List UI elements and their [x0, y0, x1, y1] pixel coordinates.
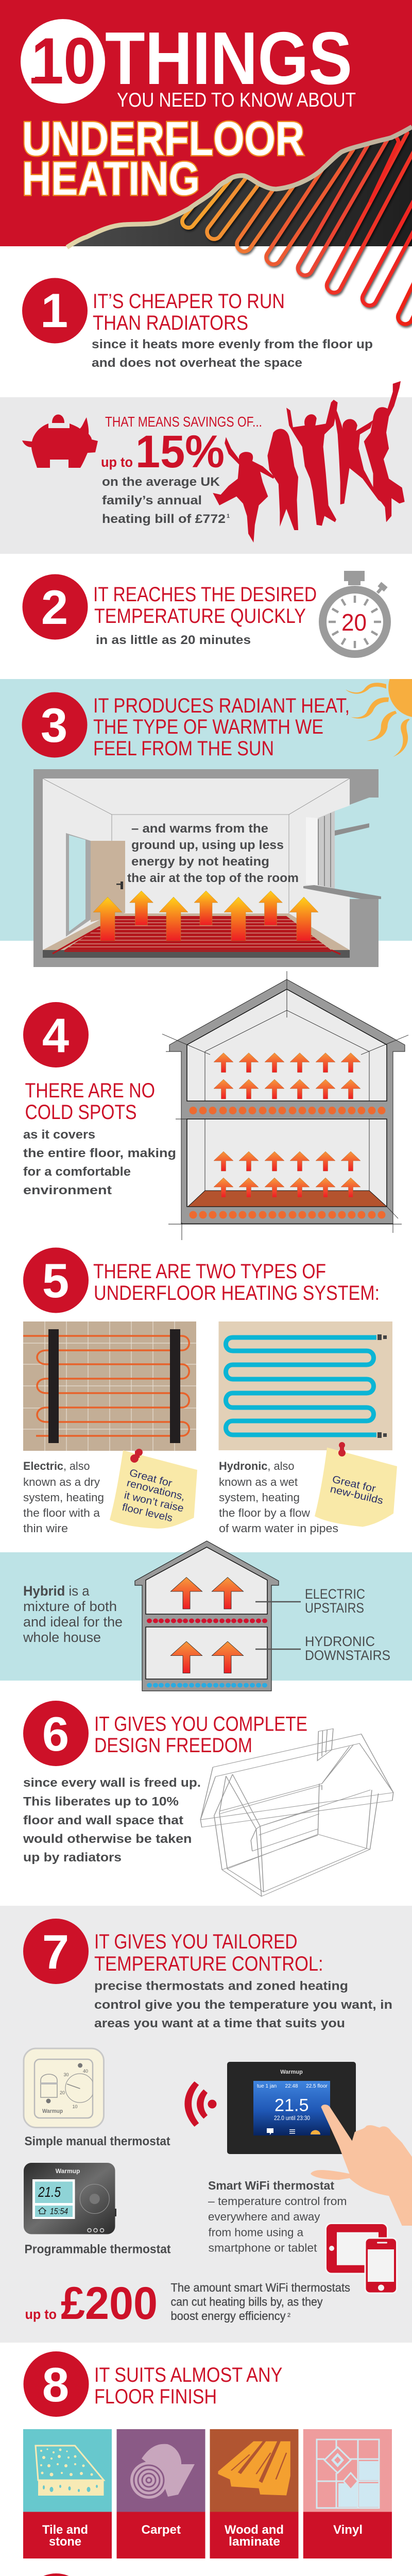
heading 5 — [93, 1260, 380, 1304]
smart thermostat text: smartphone or tablet — [208, 2242, 317, 2255]
room text: – and warms from the — [131, 822, 268, 836]
body text 6: This liberates up to 10% — [23, 1795, 179, 1808]
manual thermostat: 10 — [72, 2104, 78, 2109]
label: Vinyl — [333, 2523, 363, 2537]
body text 6 — [23, 1776, 201, 1865]
electric description: system, heating — [23, 1491, 104, 1504]
body text 6: since every wall is freed up. — [23, 1776, 201, 1790]
leader lines — [255, 1602, 301, 1649]
caption: programmable: Programmable thermostat — [25, 2242, 171, 2256]
section 9: less dust — [24, 2573, 389, 2576]
label: Wood and — [225, 2523, 284, 2537]
body text 1: and does not overheat the space — [92, 356, 302, 370]
heading 2: TEMPERATURE QUICKLY — [94, 605, 306, 628]
heading 1: IT’S CHEAPER TO RUN — [93, 290, 285, 313]
savings text — [102, 475, 230, 526]
wireframe house — [200, 1728, 393, 1896]
hybrid arrows — [170, 1578, 244, 1673]
heading 8: IT SUITS ALMOST ANY — [94, 2364, 282, 2386]
section 1: cheaper to run — [22, 278, 373, 370]
label: Tile and — [42, 2523, 88, 2537]
electric description: the floor with a — [23, 1506, 100, 1519]
smart thermostat: 22:48 — [285, 2083, 298, 2089]
heated floor dots — [190, 1107, 385, 1219]
badge 8 — [24, 2351, 89, 2417]
hybrid text: Hybrid is a — [23, 1583, 90, 1599]
smart thermostat: Warmup — [280, 2069, 303, 2075]
smart thermostat text: – temperature control from — [208, 2195, 347, 2208]
room text: ground up, using up less — [131, 838, 284, 852]
house cross-section — [162, 971, 408, 1240]
title: you need to know about: YOU NEED TO KNOW ABOUT — [117, 89, 356, 111]
body text 1: since it heats more evenly from the floor up — [92, 337, 373, 351]
hydronic description: Hydronic, also — [219, 1460, 295, 1472]
body text 6: would otherwise be taken — [23, 1832, 192, 1846]
title: underfloor: UNDERFLOOR — [22, 112, 304, 165]
badge 7: 7 — [42, 1925, 69, 1979]
floor — [43, 913, 350, 958]
icon: sun — [346, 679, 412, 757]
label: laminate — [229, 2535, 280, 2549]
programmable thermostat: Warmup — [56, 2167, 80, 2175]
heading 1 — [93, 290, 285, 334]
silhouettes of jumping family — [213, 381, 405, 543]
section 4: no cold spots — [23, 971, 408, 1240]
badge 3: 3 — [41, 698, 67, 752]
panel: savings — [0, 381, 412, 554]
sticky note: new-builds: Great for — [331, 1473, 377, 1495]
icon: wood planks — [218, 2441, 290, 2495]
label — [225, 2523, 284, 2549]
side door opening — [66, 833, 91, 937]
label: Carpet — [141, 2523, 181, 2537]
badge 9 — [24, 2573, 89, 2576]
heat arrows — [93, 891, 318, 941]
heading 6 — [94, 1713, 307, 1757]
electric description: known as a dry — [23, 1476, 100, 1488]
label: hydronic downstairs: HYDRONIC — [305, 1634, 375, 1649]
badge 2 — [23, 574, 88, 640]
badge 8: 8 — [42, 2358, 69, 2412]
stat: up to 15%: 15% — [135, 426, 225, 477]
caption: simple manual: Simple manual thermostat — [25, 2134, 170, 2148]
label: electric upstairs: UPSTAIRS — [305, 1600, 364, 1616]
pin — [130, 1449, 143, 1463]
sticky note: renovations: floor levels — [121, 1501, 174, 1524]
heading 8 — [94, 2364, 282, 2408]
smart thermostat text: Smart WiFi thermostat — [208, 2179, 334, 2192]
section 5: two types of system — [23, 1248, 397, 1535]
beige floor band — [67, 127, 412, 247]
body text 7 — [94, 1979, 392, 2030]
room text — [127, 822, 299, 885]
window — [303, 799, 381, 899]
badge 5: 5 — [42, 1253, 69, 1308]
sticky note: renovations: it won’t raise — [123, 1489, 185, 1514]
manual thermostat: 30 — [63, 2072, 69, 2077]
stat description: 2 — [287, 2312, 290, 2318]
icon: stopwatch — [322, 571, 388, 654]
heading 3: IT PRODUCES RADIANT HEAT, — [93, 694, 350, 717]
screen icons — [267, 2128, 295, 2135]
section 2: reaches temperature quickly — [23, 571, 388, 654]
savings text: on the average UK — [102, 475, 220, 489]
manual thermostat: 20 — [60, 2090, 65, 2095]
sticky note: new-builds: new-builds — [329, 1483, 384, 1506]
hydronic description: system, heating — [219, 1491, 300, 1504]
header panel — [0, 0, 412, 324]
electric dots — [147, 1619, 267, 1623]
heading 3: FEEL FROM THE SUN — [93, 737, 274, 760]
header circle with 10: 10 — [31, 24, 96, 97]
icon: tablet and phone — [325, 2224, 397, 2293]
label: electric upstairs: ELECTRIC — [305, 1586, 365, 1602]
hydronic description: the floor by a flow — [219, 1506, 310, 1519]
heading 4: THERE ARE NO — [25, 1079, 155, 1102]
label: hydronic downstairs — [305, 1634, 390, 1663]
icon: carpet roll — [130, 2444, 195, 2499]
heading 2 — [93, 583, 317, 628]
body text 4: for a comfortable — [23, 1165, 131, 1179]
body text 7: precise thermostats and zoned heating — [94, 1979, 348, 1993]
pin — [338, 1442, 346, 1456]
smart thermostat: 21.5 — [274, 2096, 309, 2115]
card: wood and laminate — [210, 2429, 299, 2558]
heading 6: DESIGN FREEDOM — [94, 1734, 252, 1757]
hybrid text: and ideal for the — [23, 1614, 123, 1630]
room text: the air at the top of the room — [127, 871, 299, 885]
programmable thermostat: 15:54 — [50, 2207, 68, 2216]
badge 1: 1 — [41, 283, 68, 337]
hydronic description: known as a wet — [219, 1476, 298, 1488]
label — [42, 2523, 88, 2549]
stat: up to 15%: up to — [101, 454, 133, 470]
manual thermostat: Warmup — [42, 2108, 63, 2114]
heading 3 — [93, 694, 350, 760]
room text: energy by not heating — [131, 855, 269, 869]
heading 2: IT REACHES THE DESIRED — [93, 583, 317, 606]
stat: up to £200: up to — [25, 2307, 57, 2322]
door — [91, 841, 125, 922]
programmable thermostat — [24, 2163, 116, 2234]
body text 2: in as little as 20 minutes — [96, 633, 251, 647]
smart thermostat text: everywhere and away — [208, 2210, 320, 2223]
stat: up to £200: £200 — [61, 2277, 158, 2329]
room illustration — [33, 769, 381, 967]
heading 4 — [25, 1079, 155, 1124]
stat description: The amount smart WiFi thermostats — [171, 2281, 350, 2294]
hydronic description — [219, 1460, 338, 1535]
electric system diagram — [23, 1321, 196, 1451]
card: tile and stone — [23, 2429, 112, 2558]
sticky note: renovations: renovations, — [126, 1478, 186, 1503]
hydronic dots — [147, 1683, 267, 1688]
hydronic system diagram — [218, 1321, 392, 1450]
smart thermostat: 22.0 until 23:30 — [274, 2114, 310, 2122]
heading 6: IT GIVES YOU COMPLETE — [94, 1713, 307, 1735]
badge 6: 6 — [42, 1707, 69, 1761]
icon: wifi signal — [184, 2081, 216, 2127]
icon: vinyl pattern — [317, 2439, 379, 2508]
heading 7: IT GIVES YOU TAILORED — [94, 1930, 298, 1953]
icon: stopwatch: 20 — [341, 609, 367, 636]
electric description: Electric, also — [23, 1460, 90, 1472]
stat description: boost energy efficiency — [171, 2309, 286, 2323]
badge 2: 2 — [41, 580, 68, 634]
hybrid text: mixture of both — [23, 1599, 117, 1614]
panel: temperature control — [0, 1906, 412, 2343]
hand — [311, 2105, 412, 2226]
smart thermostat: 22.5 floor — [306, 2083, 328, 2089]
badge 3 — [22, 692, 88, 757]
sticky note: new-builds — [315, 1442, 397, 1527]
heading 3: THE TYPE OF WARMTH WE — [93, 716, 323, 738]
smart thermostat text — [208, 2179, 347, 2255]
sticky note: renovations: Great for — [128, 1467, 174, 1489]
programmable thermostat: 21.5 — [38, 2184, 61, 2200]
section 8: floor finishes — [23, 2351, 392, 2558]
panel: hybrid — [0, 1541, 412, 1691]
sticky note: renovations — [110, 1449, 197, 1529]
hydronic description: of warm water in pipes — [219, 1522, 338, 1535]
label: electric upstairs — [305, 1586, 365, 1616]
body text 1 — [92, 337, 373, 370]
icon: tile — [36, 2446, 104, 2496]
body text 4: as it covers — [23, 1128, 95, 1142]
body text 4 — [23, 1128, 176, 1197]
smart thermostat: tue 1 jan — [257, 2083, 277, 2089]
badge 4 — [23, 1002, 89, 1067]
body text 6: floor and wall space that — [23, 1814, 183, 1827]
heading 7 — [94, 1930, 323, 1975]
manual thermostat — [24, 2048, 104, 2128]
savings text: 1 — [227, 513, 230, 519]
heading 8: FLOOR FINISH — [94, 2385, 217, 2408]
heading 5: THERE ARE TWO TYPES OF — [93, 1260, 326, 1283]
electric description: thin wire — [23, 1522, 68, 1535]
manual thermostat: 40 — [83, 2069, 88, 2074]
heating pipes — [182, 131, 412, 324]
badge 6 — [23, 1701, 89, 1766]
title: heating: HEATING — [22, 152, 200, 205]
savings text: family’s annual — [102, 494, 202, 507]
body text 4: the entire floor, making — [23, 1146, 176, 1160]
smart thermostat — [227, 2062, 356, 2154]
savings heading: THAT MEANS SAVINGS OF... — [105, 414, 262, 430]
hybrid text — [23, 1583, 123, 1645]
title: things: THINGS — [105, 16, 352, 100]
heading 4: COLD SPOTS — [25, 1101, 137, 1124]
card: carpet — [116, 2429, 205, 2558]
electric description — [23, 1460, 104, 1535]
badge 5 — [23, 1248, 89, 1313]
body text 6: up by radiators — [23, 1851, 122, 1865]
badge 7 — [23, 1919, 89, 1984]
hybrid house — [135, 1541, 279, 1691]
icon: piggy bank — [22, 414, 98, 468]
section 6: design freedom — [23, 1701, 393, 1896]
hybrid text: whole house — [23, 1630, 101, 1645]
body text 4: environment — [23, 1183, 112, 1197]
card: vinyl — [303, 2429, 392, 2558]
badge 1 — [22, 278, 88, 343]
dark floor wedge — [67, 127, 412, 247]
body text 7: areas you want at a time that suits you — [94, 2016, 345, 2030]
body text 7: control give you the temperature you want, in — [94, 1998, 392, 2012]
label: hydronic downstairs: DOWNSTAIRS — [305, 1648, 390, 1663]
heading 7: TEMPERATURE CONTROL: — [94, 1953, 323, 1975]
panel: radiant heat — [0, 658, 412, 967]
savings text: heating bill of £772 — [102, 512, 226, 526]
stat description: can cut heating bills by, as they — [171, 2295, 323, 2309]
label: stone — [49, 2535, 81, 2549]
smart thermostat text: from home using a — [208, 2226, 304, 2239]
heading 1: THAN RADIATORS — [93, 312, 248, 334]
badge 4: 4 — [42, 1008, 69, 1062]
stat description — [171, 2281, 350, 2323]
house arrows — [214, 1053, 360, 1197]
